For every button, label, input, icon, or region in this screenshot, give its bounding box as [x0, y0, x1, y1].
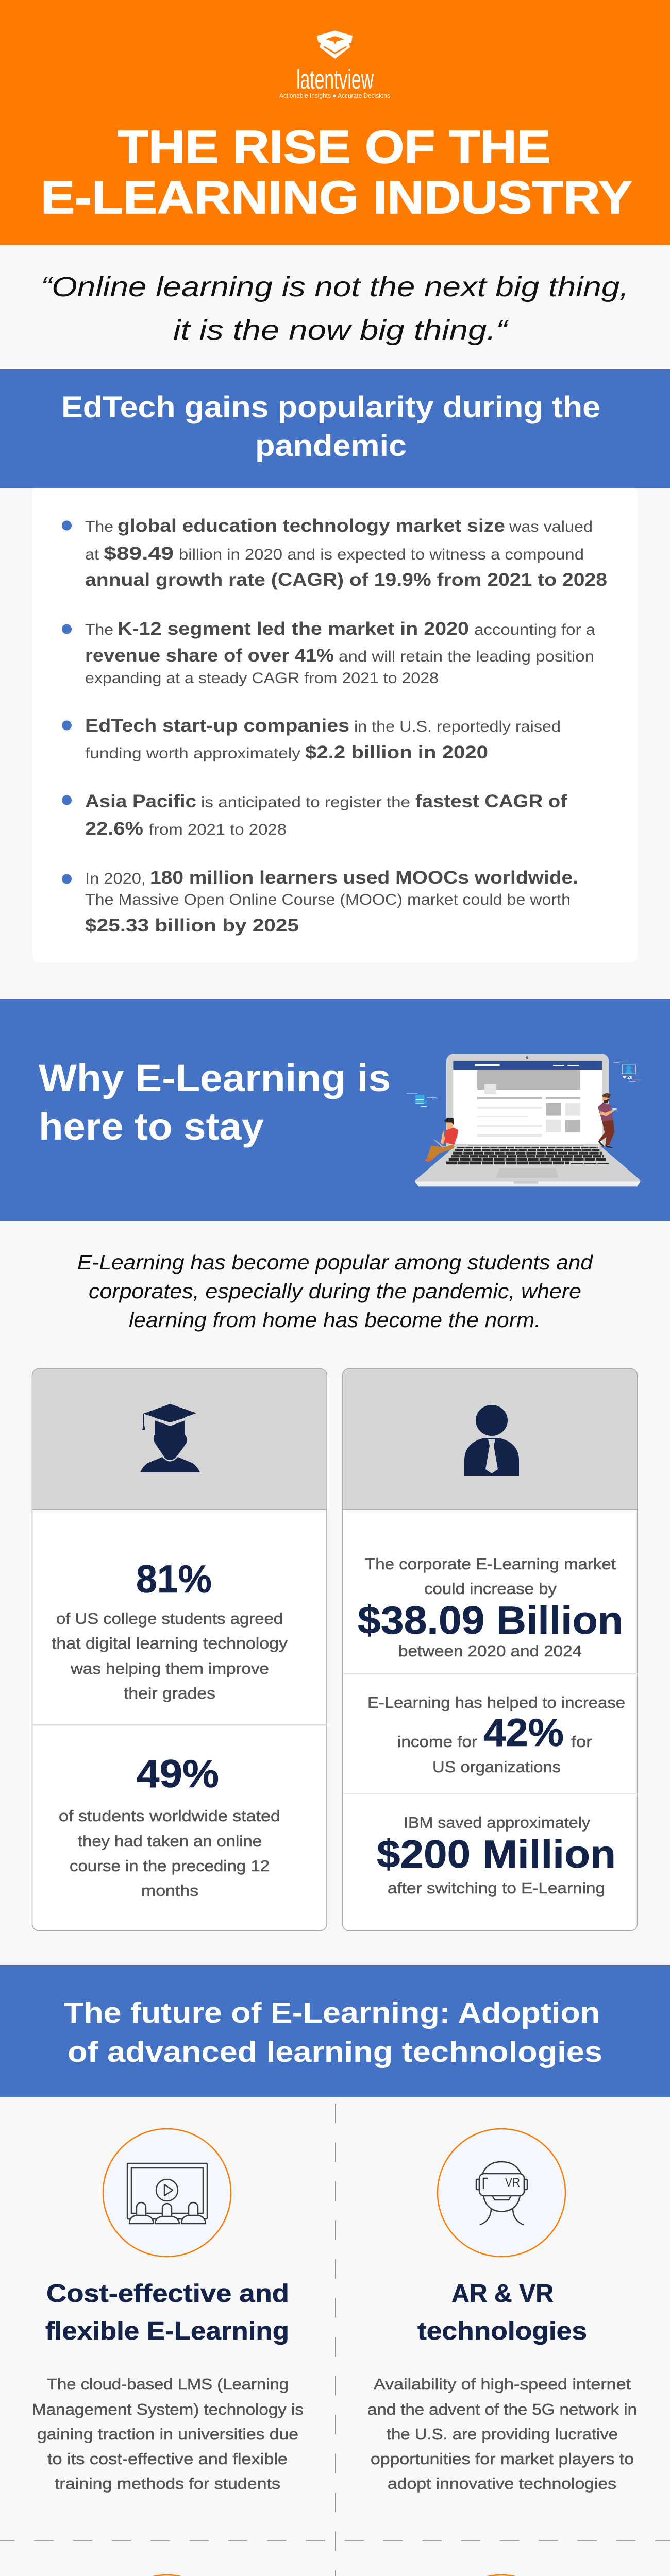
- heading: Cost-effective and: [46, 2280, 289, 2308]
- fact: global market size: global education technology market size: [118, 516, 505, 536]
- heading: [39, 1057, 391, 1148]
- body text: gaining traction in universities due: [37, 2425, 298, 2443]
- fact: K-12 segment: accounting for a: [474, 621, 595, 638]
- fact: global market size: billion in 2020 and is expected to witness a compound: [179, 546, 584, 563]
- left user: [427, 1144, 454, 1160]
- illustration: laptop with two users: 2k: [627, 1075, 632, 1080]
- fact: global market size: was valued: [509, 518, 593, 535]
- panel: students card: [32, 1368, 327, 1931]
- panel: EdTech facts card: [32, 488, 638, 962]
- icon: LatentView logo shield: [317, 30, 353, 59]
- panel: change in teaching: [38, 2575, 298, 2576]
- fact: global market size: [62, 516, 607, 590]
- logo wordmark: latentview: [296, 64, 374, 95]
- fact: K-12 segment: K-12 segment led the market in 2020: [118, 619, 469, 639]
- panel: SMART devices: [376, 2575, 628, 2576]
- stat: 42%: for: [571, 1733, 592, 1751]
- heading: pandemic: [255, 429, 407, 463]
- stat: $38.09 Billion: [358, 1555, 623, 1660]
- heading: [64, 1996, 602, 2069]
- fact: start-up funding: $2.2 billion in 2020: [305, 742, 488, 762]
- heading: of advanced learning technologies: [68, 2036, 602, 2069]
- stat: 49%: of students worldwide stated: [59, 1807, 280, 1825]
- stat: $38.09 Billion: The corporate E-Learning market: [365, 1555, 616, 1573]
- stat: 49%: 49%: [137, 1752, 219, 1796]
- fact: MOOCs: 180 million learners used MOOCs worldwide.: [150, 868, 578, 888]
- panel: corporate card: [342, 1368, 638, 1931]
- panel: EdTech heading band: [0, 369, 670, 488]
- stat: $38.09 Billion: could increase by: [424, 1580, 557, 1598]
- stat: 81%: their grades: [124, 1684, 215, 1702]
- icon: touchscreen laptop in circle: [438, 2575, 565, 2576]
- heading: technologies: [417, 2317, 587, 2345]
- body text: [367, 2375, 637, 2493]
- body text: Availability of high-speed internet: [374, 2375, 631, 2393]
- stat: 49%: months: [141, 1882, 198, 1900]
- stat: 42%: [367, 1693, 625, 1776]
- floating widgets: [415, 1095, 424, 1104]
- panel: Why E-Learning band: [0, 999, 670, 1221]
- intro paragraph: corporates, especially during the pandemic, where: [89, 1279, 581, 1303]
- stat: $200 Million: IBM saved approximately: [404, 1814, 591, 1832]
- fact: Asia Pacific: [62, 791, 567, 839]
- body text: Management System) technology is: [32, 2400, 304, 2418]
- body text: the U.S. are providing lucrative: [387, 2425, 618, 2443]
- body text: [32, 2375, 304, 2493]
- heading: The future of E-Learning: Adoption: [64, 1996, 600, 2029]
- panel: cost-effective learning: [32, 2129, 304, 2493]
- heading: here to stay: [39, 1105, 264, 1148]
- fact: MOOCs: $25.33 billion by 2025: [85, 916, 299, 936]
- fact: start-up funding: funding worth approximately: [85, 745, 300, 762]
- body text: The cloud-based LMS (Learning: [47, 2375, 289, 2393]
- fact: K-12 segment: and will retain the leading position: [339, 648, 594, 665]
- heading: [45, 2280, 289, 2345]
- icon: teacher on monitor in circle: [103, 2575, 231, 2576]
- stat: 81%: of US college students agreed: [56, 1609, 283, 1628]
- icon: VR headset in circle: [438, 2129, 565, 2257]
- fact: global market size: at: [85, 546, 99, 563]
- heading: Why E-Learning is: [39, 1057, 391, 1099]
- fact: start-up funding: EdTech start-up companies: [85, 716, 349, 736]
- body text: and the advent of the 5G network in: [367, 2400, 637, 2418]
- fact: K-12 segment: revenue share of over 41%: [85, 646, 334, 666]
- icon: graduate: [140, 1404, 200, 1472]
- intro paragraph: E-Learning has become popular among students and: [77, 1250, 593, 1274]
- fact: global market size: The: [85, 518, 113, 535]
- fact: Asia Pacific: 22.6%: [85, 819, 143, 839]
- fact: start-up funding: [62, 716, 561, 762]
- stat: 81%: [52, 1557, 288, 1702]
- stat: 81%: 81%: [136, 1557, 212, 1601]
- icon: business person: [464, 1405, 519, 1476]
- heading: [417, 2280, 587, 2345]
- stat: $200 Million: [377, 1814, 616, 1897]
- fact: K-12 segment: expanding at a steady CAGR from 2021 to 2028: [85, 670, 439, 687]
- fact: MOOCs: The Massive Open Online Course (MOOC) market could be worth: [85, 891, 571, 908]
- heading: EdTech gains popularity during the: [61, 391, 600, 424]
- quote: “Online learning is not the next big thing,: [41, 272, 629, 302]
- fact: Asia Pacific: fastest CAGR of: [415, 791, 567, 811]
- stat: 49%: course in the preceding 12: [70, 1857, 270, 1875]
- stat: 49%: [59, 1752, 280, 1900]
- panel: AR and VR: [367, 2129, 637, 2493]
- body text: training methods for students: [55, 2475, 280, 2493]
- quote: [41, 272, 629, 346]
- stat: 42%: US organizations: [432, 1758, 561, 1776]
- icon: VR headset in circle: VR: [505, 2176, 520, 2190]
- illustration: laptop with two users: [407, 1054, 641, 1186]
- icon: classroom screen in circle: [103, 2129, 231, 2257]
- fact: Asia Pacific: Asia Pacific: [85, 791, 196, 811]
- fact: global market size: $89.49: [104, 544, 174, 564]
- stat: 81%: was helping them improve: [70, 1659, 269, 1677]
- heading: flexible E-Learning: [45, 2317, 289, 2345]
- title: THE RISE OF THE: [118, 122, 550, 173]
- stat: 42%: E-Learning has helped to increase: [367, 1693, 625, 1711]
- panel: future of E-Learning band: [0, 1965, 670, 2097]
- logo tagline: Actionable Insights ● Accurate Decisions: [279, 92, 390, 99]
- body text: to its cost-effective and flexible: [47, 2450, 288, 2468]
- fact: K-12 segment: [62, 619, 595, 687]
- stat: 81%: that digital learning technology: [52, 1634, 288, 1652]
- stat: 42%: income for: [397, 1733, 477, 1751]
- fact: K-12 segment: The: [85, 621, 113, 638]
- intro paragraph: [77, 1250, 593, 1332]
- body text: opportunities for market players to: [371, 2450, 634, 2468]
- stat: $38.09 Billion: between 2020 and 2024: [398, 1642, 582, 1660]
- right user: [599, 1119, 615, 1145]
- fact: start-up funding: in the U.S. reportedly raised: [354, 718, 561, 735]
- title: [41, 122, 632, 224]
- stat: $200 Million: $200 Million: [377, 1833, 616, 1876]
- fact: Asia Pacific: is anticipated to register the: [201, 794, 410, 811]
- intro paragraph: learning from home has become the norm.: [129, 1308, 541, 1332]
- panel: header: [0, 0, 670, 245]
- body text: adopt innovative technologies: [388, 2475, 616, 2493]
- fact: MOOCs: [62, 868, 578, 936]
- title: E-LEARNING INDUSTRY: [41, 172, 632, 224]
- stat: $200 Million: after switching to E-Learning: [388, 1879, 605, 1897]
- stat: $38.09 Billion: $38.09 Billion: [358, 1599, 623, 1642]
- heading: [61, 391, 600, 463]
- fact: global market size: annual growth rate (CAGR) of 19.9% from 2021 to 2028: [85, 570, 607, 590]
- stat: 42%: 42%: [483, 1711, 564, 1755]
- fact: Asia Pacific: from 2021 to 2028: [149, 821, 287, 838]
- stat: 49%: they had taken an online: [78, 1832, 262, 1850]
- quote: it is the now big thing.“: [173, 315, 509, 346]
- fact: MOOCs: In 2020,: [85, 870, 146, 887]
- heading: AR & VR: [451, 2280, 554, 2308]
